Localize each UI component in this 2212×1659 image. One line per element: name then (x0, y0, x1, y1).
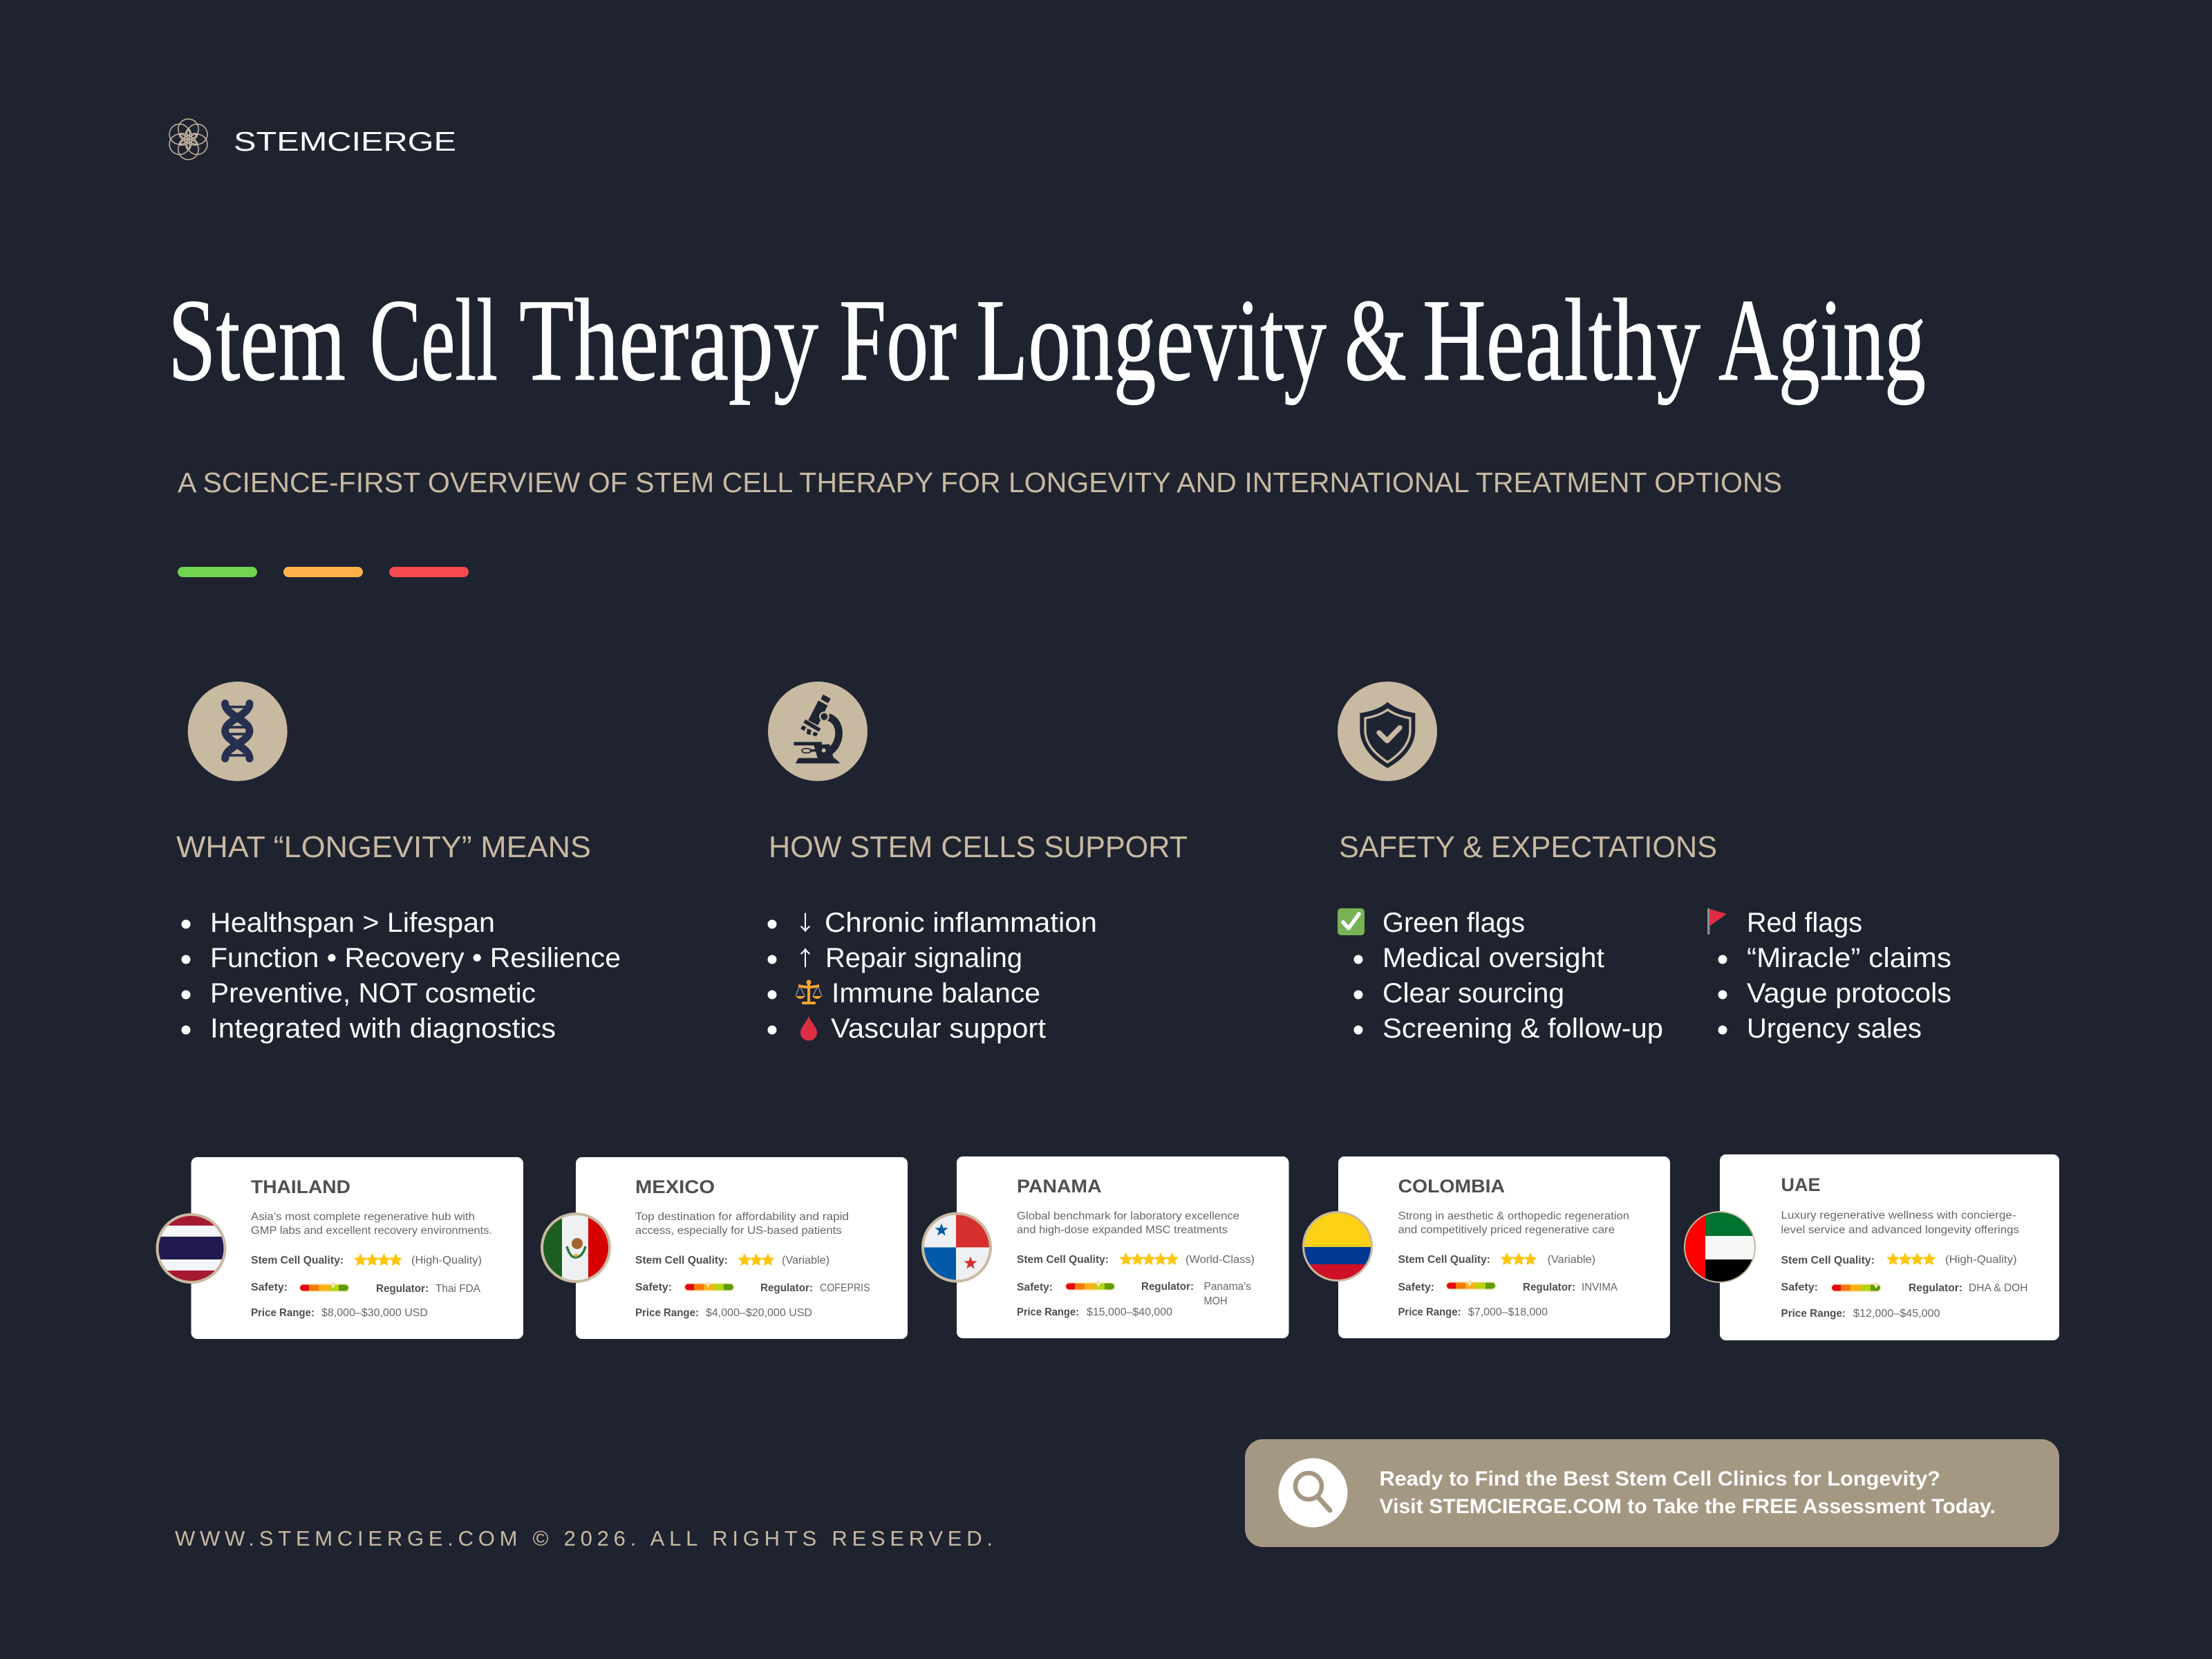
quality rating (1781, 1254, 2017, 1266)
bullet list: Preventive, NOT cosmetic (210, 978, 536, 1009)
safety meter (1017, 1281, 1116, 1293)
icon: magnifying glass (1279, 1459, 1348, 1528)
price range: Price Range: (1781, 1308, 1846, 1320)
safety meter (1781, 1282, 1882, 1293)
call to action text: Ready to Find the Best Stem Cell Clinics for Longevity? (1380, 1468, 1940, 1490)
quality rating: Stem Cell Quality: (635, 1255, 728, 1266)
safety meter (251, 1282, 350, 1293)
red flags list (1707, 908, 1951, 1044)
bullet list: Function • Recovery • Resilience (210, 943, 621, 973)
heading: SAFETY & EXPECTATIONS (1339, 830, 1717, 864)
green flags list: Medical oversight (1382, 943, 1604, 973)
card: Panama: and high-dose expanded MSC treatments (1017, 1224, 1228, 1236)
card: Mexico: access, especially for US-based patients (635, 1225, 842, 1237)
quality rating: (High-Quality) (411, 1255, 482, 1266)
title: Stem (168, 275, 346, 405)
price range (1781, 1308, 1940, 1320)
call to action banner: Visit STEMCIERGE.COM to Take the FREE Assessment Today. (1380, 1495, 1996, 1518)
regulator: Regulator: (1909, 1282, 1962, 1294)
regulator: Regulator: (760, 1282, 813, 1294)
safety meter (635, 1282, 735, 1293)
quality rating (1398, 1254, 1595, 1266)
description: Asia’s most complete regenerative hub with (251, 1211, 475, 1223)
green flags list: Clear sourcing (1382, 978, 1564, 1009)
price range: $4,000–$20,000 USD (706, 1307, 812, 1319)
regulator: Regulator: (1141, 1281, 1194, 1293)
price range: $8,000–$30,000 USD (321, 1307, 428, 1319)
card: UAE: level service and advanced longevity offerings (1781, 1224, 2019, 1236)
heading: WHAT “LONGEVITY” MEANS (176, 830, 591, 864)
regulator: INVIMA (1582, 1282, 1618, 1293)
country name: COLOMBIA (1398, 1176, 1505, 1197)
red flags list: Red flags (1747, 908, 1862, 938)
card: Mexico (541, 1157, 908, 1339)
card: UAE (1684, 1154, 2059, 1340)
quality rating: (Variable) (1548, 1254, 1595, 1266)
flag: Thailand (156, 1213, 227, 1284)
red flags list: Vague protocols (1747, 978, 1951, 1009)
regulator (376, 1283, 481, 1295)
footer copyright: WWW.STEMCIERGE.COM © 2026. ALL RIGHTS RESERVED. (175, 1526, 993, 1550)
regulator (1909, 1282, 2028, 1294)
safety meter: Safety: (251, 1282, 288, 1293)
regulator: Panama’s (1204, 1281, 1251, 1293)
panel: what longevity means (176, 682, 621, 1044)
quality rating: (World-Class) (1185, 1254, 1255, 1266)
price range: Price Range: (251, 1307, 315, 1319)
regulator: Thai FDA (435, 1283, 481, 1295)
panel: how stem cells support (767, 682, 1188, 1044)
description: Top destination for affordability and rapid (635, 1211, 849, 1223)
green flags list: Green flags (1382, 908, 1525, 938)
card: Thailand: GMP labs and excellent recovery environments. (251, 1225, 492, 1237)
icon: shield (1338, 682, 1437, 781)
title (168, 275, 1926, 405)
country name: UAE (1781, 1174, 1821, 1195)
safety meter: Safety: (635, 1282, 672, 1293)
quality rating: Stem Cell Quality: (251, 1255, 344, 1266)
regulator: DHA & DOH (1969, 1282, 2028, 1294)
card: Colombia (1302, 1156, 1670, 1338)
safety meter (1398, 1280, 1497, 1293)
quality rating: Stem Cell Quality: (1398, 1254, 1490, 1266)
regulator: Regulator: (376, 1283, 429, 1295)
flag: UAE (1684, 1211, 1756, 1283)
country name: PANAMA (1017, 1176, 1102, 1197)
card: Colombia: and competitively priced regenerative care (1398, 1224, 1615, 1236)
regulator (1523, 1282, 1618, 1293)
regulator: MOH (1204, 1295, 1228, 1307)
price range (251, 1307, 428, 1319)
regulator: Regulator: (1523, 1282, 1575, 1293)
price range: $12,000–$45,000 (1853, 1308, 1940, 1320)
call to action banner (1245, 1439, 2059, 1547)
green flags list (1338, 908, 1663, 1044)
bullet list (767, 906, 1097, 1044)
title: Cell (370, 275, 498, 405)
flag: Panama (921, 1212, 992, 1283)
panel: safety and expectations (1338, 682, 1951, 1044)
price range: Price Range: (635, 1307, 699, 1319)
regulator (760, 1282, 870, 1294)
flag: Mexico (541, 1212, 611, 1283)
quality rating (635, 1254, 830, 1266)
regulator: COFEPRIS (820, 1282, 870, 1294)
bullet list: Vascular support (831, 1013, 1046, 1044)
title: Longevity (976, 275, 1327, 405)
price range: Price Range: (1398, 1306, 1461, 1318)
quality rating: Stem Cell Quality: (1017, 1254, 1109, 1266)
bullet list: Healthspan > Lifespan (210, 908, 495, 938)
bullet list: Chronic inflammation (825, 908, 1097, 938)
icon: flower of life (169, 119, 207, 160)
title: Therapy (519, 275, 818, 405)
title: & (1344, 275, 1407, 405)
price range (1017, 1306, 1172, 1318)
red flags list: Urgency sales (1747, 1013, 1922, 1044)
quality rating: (High-Quality) (1945, 1254, 2017, 1266)
traffic-light accent bars (178, 567, 469, 577)
title: For (839, 275, 957, 405)
brand logo and name (169, 119, 456, 160)
description: Strong in aesthetic & orthopedic regeneration (1398, 1210, 1629, 1222)
brand name: STEMCIERGE (234, 127, 456, 157)
country name: MEXICO (635, 1177, 715, 1197)
red flags list: “Miracle” claims (1747, 943, 1951, 973)
bullet list: ↑ (795, 941, 816, 972)
safety meter: Safety: (1398, 1282, 1434, 1293)
price range: $7,000–$18,000 (1468, 1306, 1548, 1318)
quality rating (251, 1254, 482, 1266)
card: Panama (921, 1156, 1288, 1338)
quality rating (1017, 1254, 1255, 1266)
price range: $15,000–$40,000 (1087, 1306, 1172, 1318)
bullet list: Repair signaling (825, 943, 1022, 973)
bullet list: ↓ (795, 906, 816, 937)
quality rating: (Variable) (782, 1255, 830, 1266)
card: Thailand (156, 1157, 523, 1339)
icon: microscope (768, 682, 868, 781)
regulator (1141, 1281, 1251, 1307)
description: Luxury regenerative wellness with concierge- (1781, 1210, 2016, 1221)
heading: HOW STEM CELLS SUPPORT (769, 830, 1188, 864)
quality rating: Stem Cell Quality: (1781, 1255, 1875, 1266)
green flags list: Screening & follow-up (1382, 1013, 1663, 1044)
title: Aging (1718, 275, 1926, 405)
price range (1398, 1306, 1548, 1318)
icon: dna (188, 682, 288, 781)
safety meter: Safety: (1781, 1282, 1818, 1293)
price range: Price Range: (1017, 1306, 1079, 1318)
flag: Colombia (1302, 1211, 1373, 1282)
icon: blood drop (800, 1016, 817, 1041)
description: Global benchmark for laboratory excellence (1017, 1210, 1239, 1222)
title: Healthy (1423, 275, 1700, 405)
safety meter: Safety: (1017, 1282, 1053, 1293)
subtitle: A SCIENCE-FIRST OVERVIEW OF STEM CELL THERAPY FOR LONGEVITY AND INTERNATIONAL TREATMENT OPTIONS (178, 467, 1782, 498)
icon: balance scales (796, 980, 822, 1004)
country name: THAILAND (251, 1177, 350, 1197)
bullet list: Immune balance (832, 978, 1040, 1009)
price range (635, 1307, 812, 1319)
bullet list (181, 908, 621, 1044)
bullet list: Integrated with diagnostics (210, 1013, 556, 1044)
